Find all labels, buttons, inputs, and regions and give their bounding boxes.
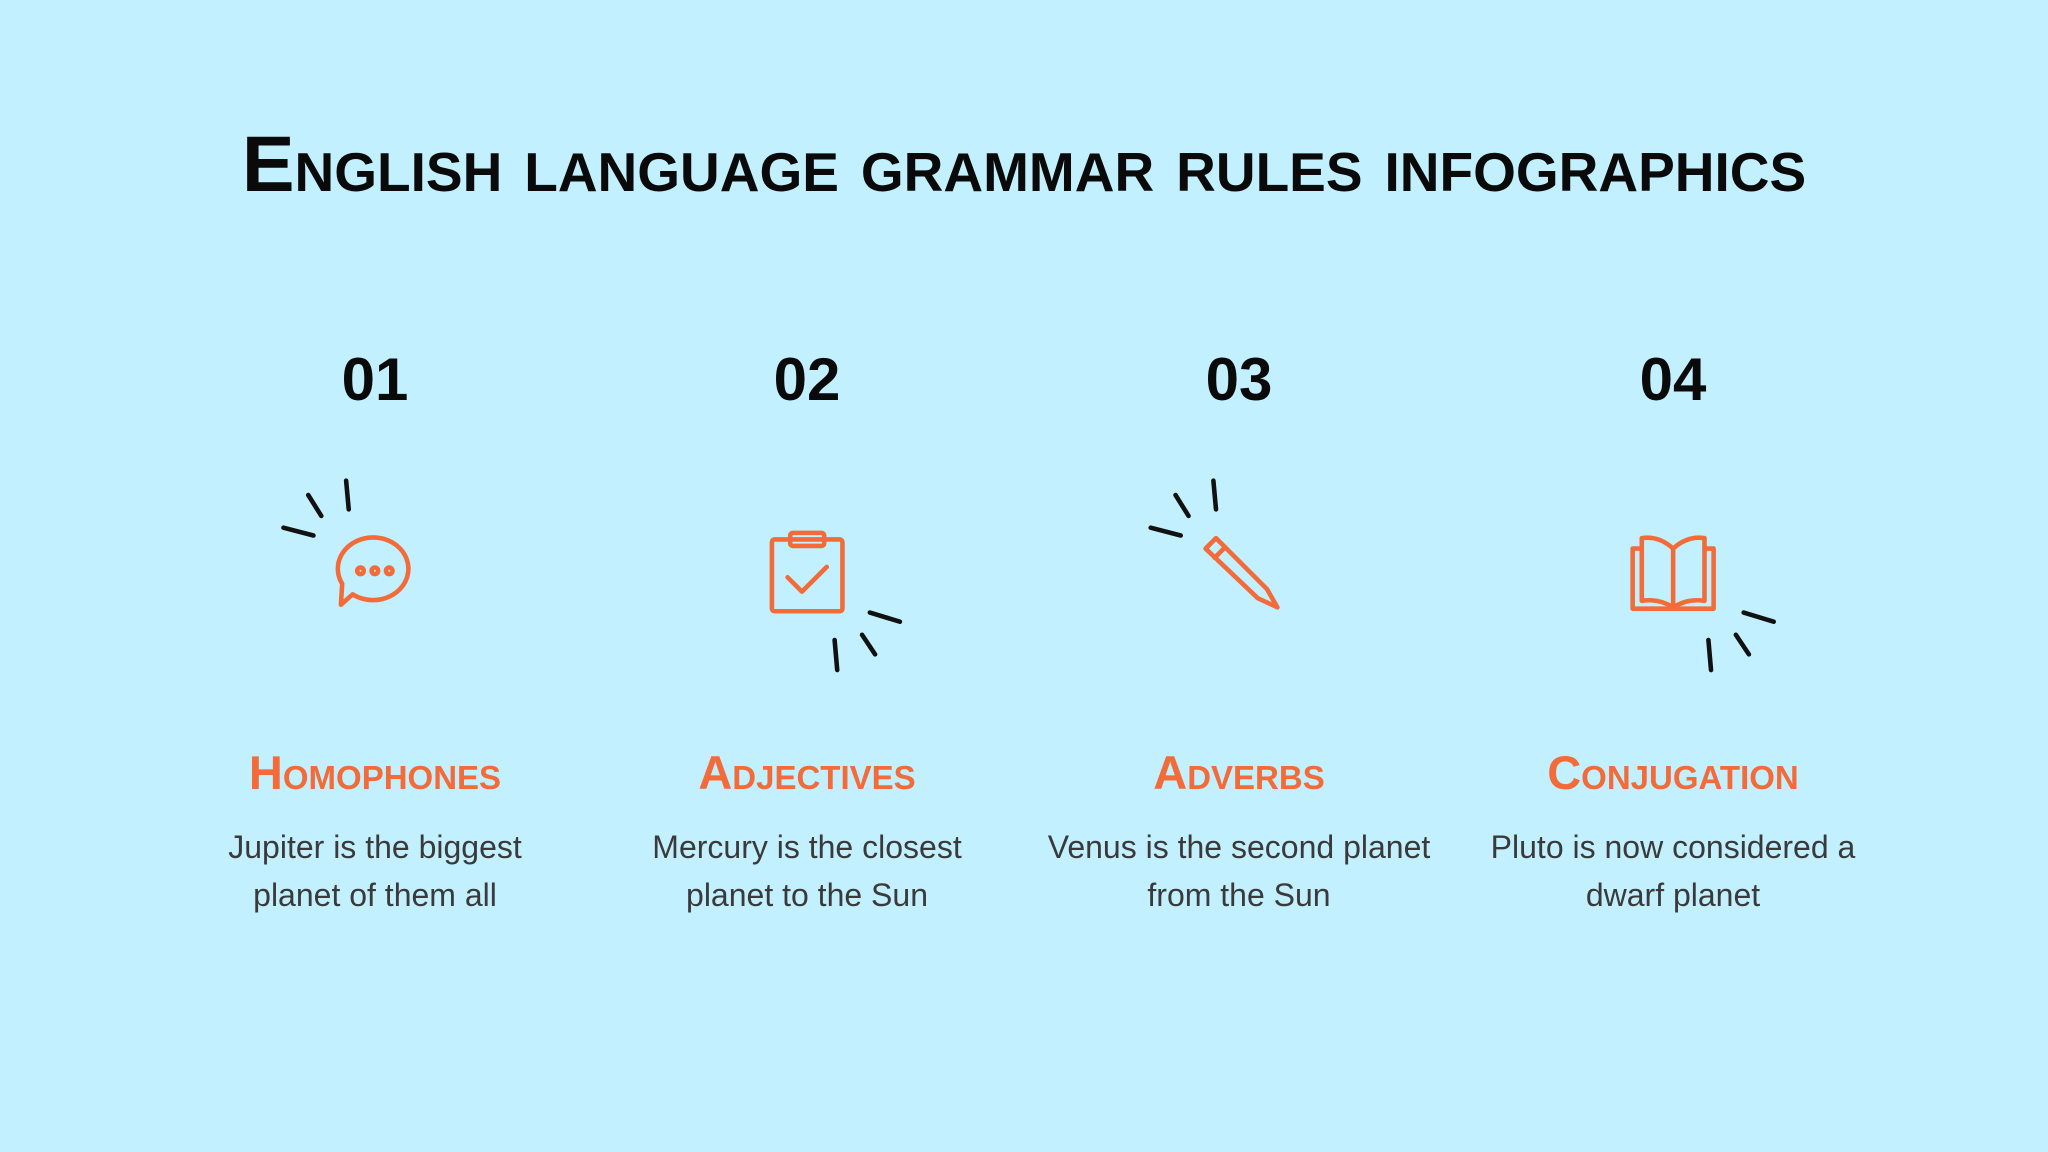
heading: adverbs: Adverbs xyxy=(1153,746,1325,799)
icon: book xyxy=(1633,538,1714,609)
dashes 2 xyxy=(835,613,900,670)
number 04: 04 xyxy=(1640,346,1706,413)
heading: adjectives: Adjectives xyxy=(698,746,916,799)
text: adverbs: Venus is the second planet xyxy=(1048,829,1430,865)
title: English language grammar rules infographics xyxy=(242,119,1806,208)
icon: speech bubble xyxy=(338,537,408,605)
dashes 4 xyxy=(1708,613,1774,670)
text: homophones: planet of them all xyxy=(253,877,497,913)
text: conjugation: Pluto is now considered a xyxy=(1491,829,1855,865)
text: adjectives: planet to the Sun xyxy=(686,877,928,913)
icon: clipboard xyxy=(772,533,842,611)
number 02: 02 xyxy=(774,346,840,413)
text: homophones xyxy=(228,829,522,913)
icon: pencil xyxy=(1206,538,1277,607)
dashes 3 xyxy=(1151,481,1216,536)
text: conjugation: dwarf planet xyxy=(1586,877,1760,913)
text: adjectives xyxy=(652,829,962,913)
number 01: 01 xyxy=(342,346,408,413)
heading: conjugation: Conjugation xyxy=(1547,746,1799,799)
text: conjugation xyxy=(1491,829,1856,913)
heading: homophones: Homophones xyxy=(249,746,501,799)
number 03: 03 xyxy=(1206,346,1272,413)
dashes 1 xyxy=(283,481,349,536)
text: adjectives: Mercury is the closest xyxy=(652,829,962,865)
text: adverbs: from the Sun xyxy=(1147,877,1331,913)
text: adverbs xyxy=(1048,829,1430,913)
text: homophones: Jupiter is the biggest xyxy=(228,829,522,865)
